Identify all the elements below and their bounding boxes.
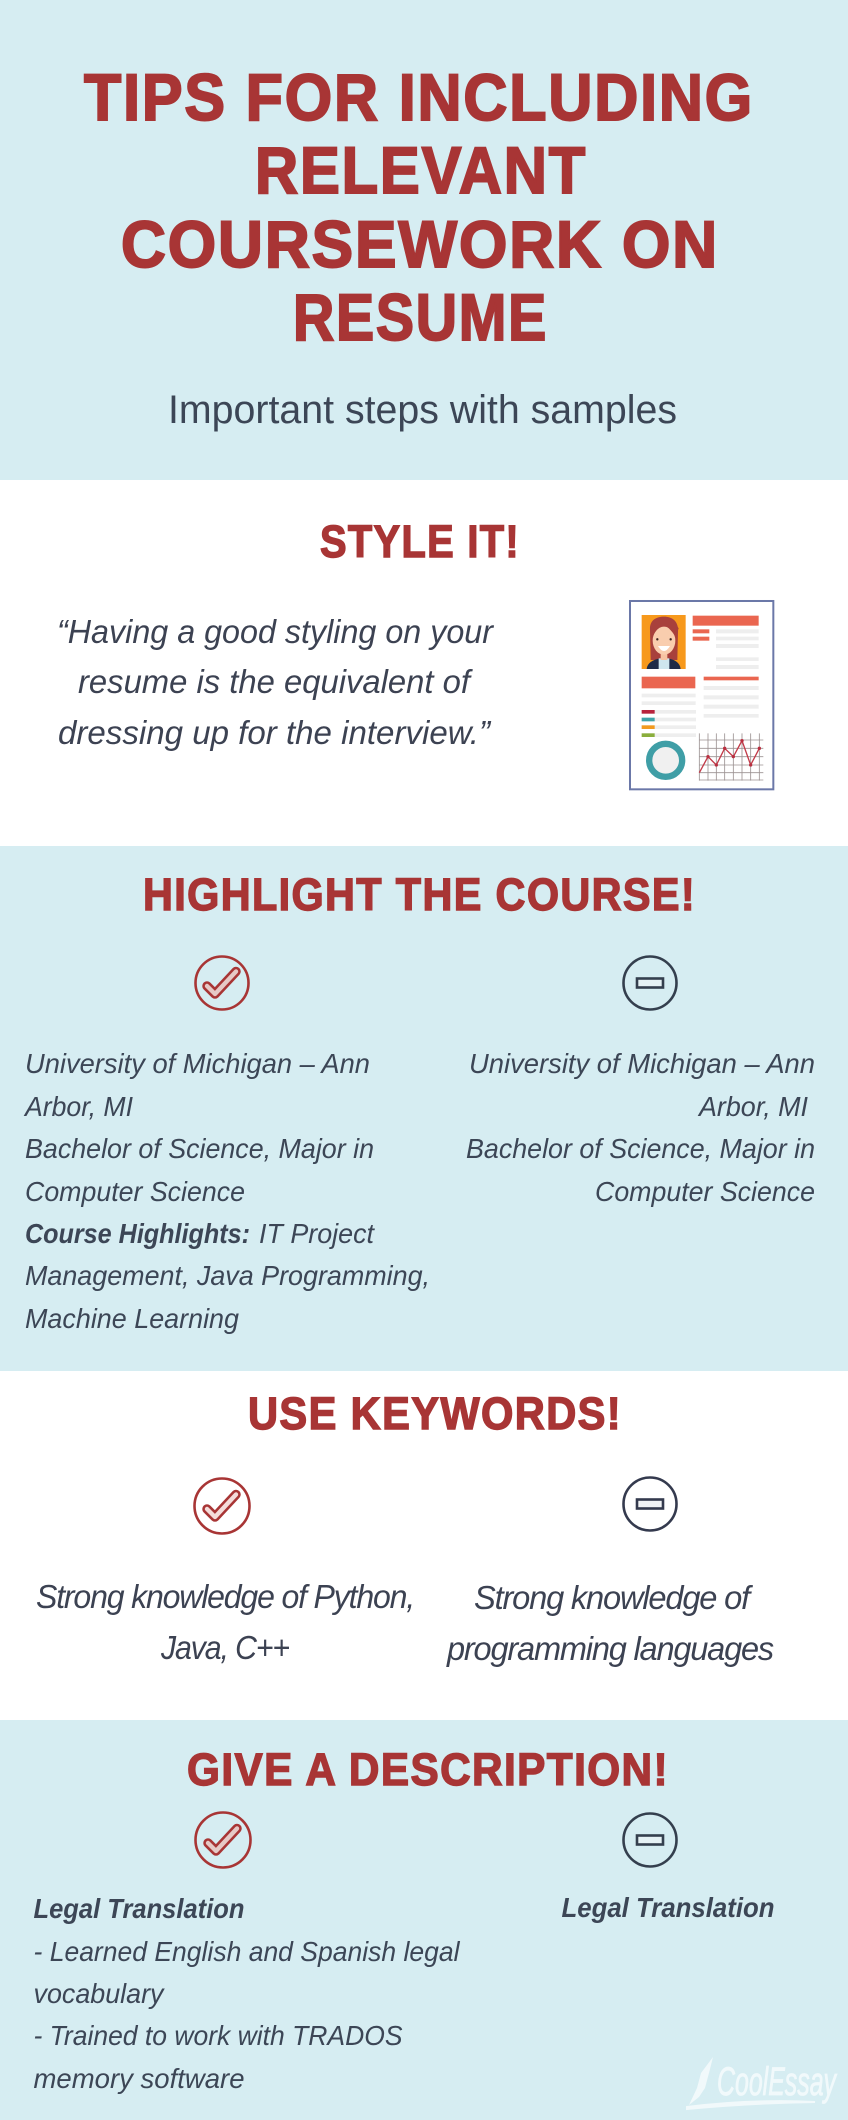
text: good example: Bachelor of Science, Major in [25,1133,374,1164]
text: good example: Machine Learning [25,1303,239,1334]
text: good example: Java, C++ [160,1629,290,1666]
icon: minus sign [624,1814,676,1866]
quote text: “Having a good styling on your [57,613,495,650]
panel: style it [0,480,848,846]
title: COURSEWORK ON [121,207,719,281]
icon: check mark [196,1812,250,1868]
icon: minus sign [624,1478,676,1530]
icon: resume document [630,601,773,789]
text: good example: Strong knowledge of Python, [36,1578,414,1615]
text: weak example: University of Michigan – Ann [469,1048,815,1079]
panel: give a description [0,1720,848,2120]
text: good example: Arbor, MI [23,1091,133,1122]
heading: highlight the course: HIGHLIGHT THE COURSE! [143,869,696,920]
subtitle: Important steps with samples [168,388,677,432]
text: good example: memory software [34,2063,244,2094]
text: good example: Legal Translation [34,1893,244,1924]
text: weak example [446,1579,774,1667]
text: good example: Course Highlights: [25,1218,250,1249]
text: weak example: Legal Translation [562,1892,774,1923]
panel: title header [0,0,848,480]
text: weak example [466,1048,815,1207]
text: weak example: Arbor, MI [697,1091,808,1122]
title: RELEVANT [255,133,587,207]
text: good example [34,1893,460,2094]
icon: check mark [194,1478,250,1534]
title [84,60,754,354]
heading: use keywords: USE KEYWORDS! [248,1388,622,1439]
text: good example: vocabulary [34,1978,165,2009]
text: weak example: Computer Science [595,1176,815,1207]
title: TIPS FOR INCLUDING [84,60,754,134]
text: good example: University of Michigan – Ann [25,1048,370,1079]
quote text: resume is the equivalent of [78,663,474,700]
text: weak example: Bachelor of Science, Major in [466,1133,815,1164]
text: weak example: Strong knowledge of [474,1579,754,1616]
text: good example: Computer Science [25,1176,245,1207]
text: good example: - Trained to work with TRADOS [34,2020,403,2051]
text: weak example: programming languages [446,1630,774,1667]
text: good example [36,1578,414,1666]
text: good example: IT Project [259,1218,375,1249]
heading: style it: STYLE IT! [320,516,520,567]
text: good example: Management, Java Programming, [25,1260,430,1291]
heading: give a description: GIVE A DESCRIPTION! [187,1744,669,1795]
title: RESUME [293,280,548,354]
icon: minus sign [624,956,676,1010]
text: good example: - Learned English and Spanish legal [34,1936,460,1967]
quote text [57,613,495,751]
quote text: dressing up for the interview.” [58,714,492,751]
text: good example [23,1048,430,1334]
icon: check mark [196,956,248,1010]
panel: highlight the course [0,846,848,1371]
logo: CoolEssay [687,2057,838,2109]
panel: use keywords [0,1371,848,1720]
